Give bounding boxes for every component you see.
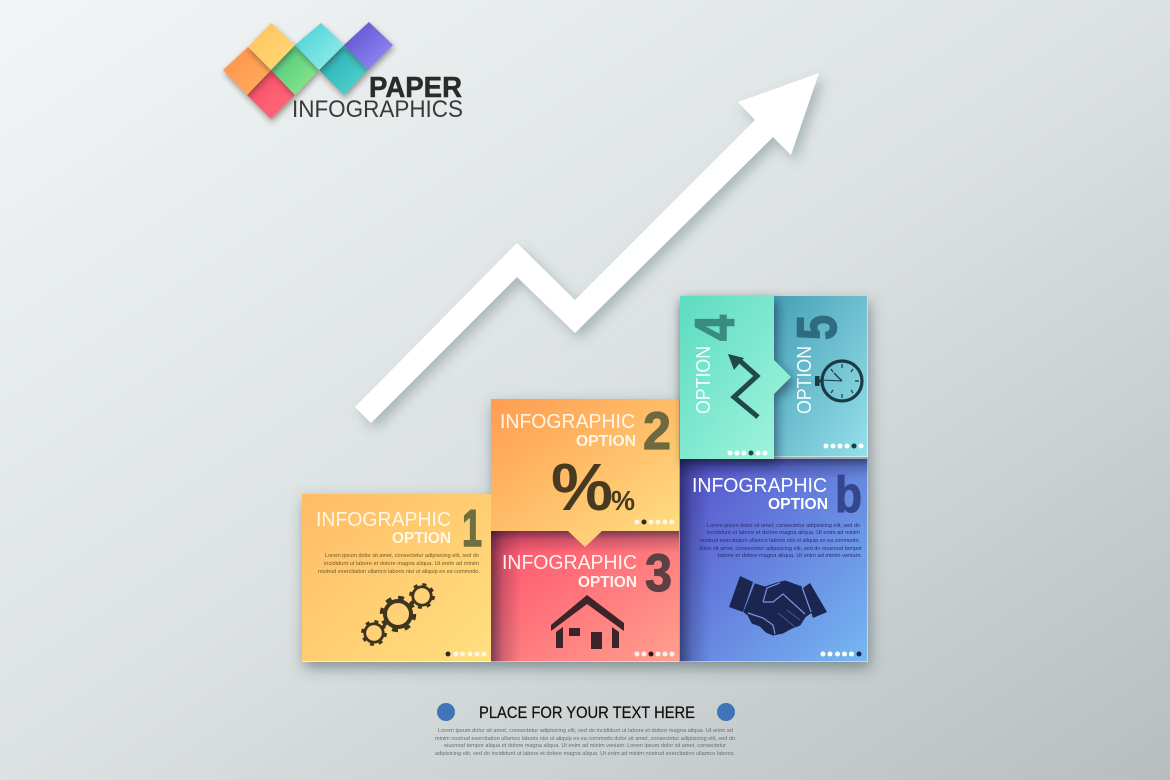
footer text block: adipisicing elit, sed do incididunt ut labore et dolore magna aliqua. Ut enim ad minim nostrud exercitation ullamco laboris. — [435, 751, 735, 757]
panel: option 4 — [680, 296, 791, 459]
pagination dots — [634, 652, 674, 656]
footer text block: minim nostrud exercitation ullamco laboris nisi ut aliquip ex ea commodo dolor sit amet, consectetur adipisicing elit, sed do — [435, 736, 735, 742]
rising white arrow — [355, 73, 819, 423]
panel: infographic option 2 — [491, 399, 679, 547]
heading: option 3: INFOGRAPHIC — [502, 552, 637, 574]
heading: option 3: OPTION — [578, 574, 637, 591]
shared panel shadow — [302, 296, 868, 662]
logo: paper infographics — [223, 22, 463, 123]
heading: option 1: INFOGRAPHIC — [316, 509, 451, 531]
logo mosaic of coloured diamonds — [223, 22, 393, 119]
footer text block — [435, 728, 735, 757]
text block: option 6: dolor sit amet, consectetur adipisicing elit, sed do eiusmod tempor — [699, 546, 862, 552]
panel: option 6 — [680, 459, 868, 662]
pointer tab — [568, 531, 602, 547]
heading: option 6: OPTION — [768, 496, 828, 513]
icon: handshake — [729, 576, 827, 635]
heading: option 2: OPTION — [576, 433, 636, 450]
text block: option 6: Lorem ipsum dolor sit amet, consectetur adipisicing elit, sed do — [707, 523, 860, 529]
pagination dots — [634, 520, 674, 524]
text block: option 6 — [699, 523, 862, 559]
icon: gears — [362, 584, 434, 644]
heading: option 1: OPTION — [392, 530, 451, 547]
logo wordmark: INFOGRAPHICS — [292, 96, 463, 123]
label: option 4: OPTION — [693, 346, 715, 414]
text block: option 1: incididunt ut labore et dolore magna aliqua. Ut enim ad minim — [324, 561, 479, 567]
footer text block: Lorem ipsum dolor sit amet, consectetur adipisicing elit, sed do incididunt ut labore et dolore magna aliqua. Ut enim ad — [438, 728, 733, 734]
panel: infographic option 1 — [302, 494, 491, 662]
text block: option 1: nostrud exercitation ullamco laboris nisi ut aliquip ex ea commodo. — [318, 569, 480, 575]
panel: option 5 — [774, 296, 868, 457]
blue dot right — [717, 703, 735, 721]
heading: option 2: INFOGRAPHIC — [500, 411, 635, 433]
heading: option 6: INFOGRAPHIC — [692, 475, 827, 497]
heading: option 6 — [692, 475, 828, 513]
text block: option 6: nostrud exercitation ullamco laboris nisi ut aliquip ex ea commodo. — [700, 538, 860, 544]
numeral b: b — [835, 466, 862, 523]
pagination dots — [728, 450, 768, 456]
heading: option 3 — [502, 552, 637, 591]
numeral 1: 1 — [462, 500, 482, 558]
text block: option 1 — [318, 553, 480, 575]
logo wordmark: PAPER — [369, 72, 462, 104]
blue dot left — [437, 703, 455, 721]
pagination dots — [446, 652, 486, 656]
numeral 5: 5 — [785, 315, 848, 340]
footer heading: PLACE FOR YOUR TEXT HERE — [479, 703, 695, 722]
panel: infographic option 3 — [491, 531, 679, 662]
icon: house — [551, 595, 624, 649]
icon: stopwatch — [815, 361, 862, 401]
footer title with blue dots — [437, 703, 735, 722]
label: option 5: OPTION — [794, 346, 816, 414]
numeral 4: 4 — [683, 315, 746, 341]
footer text block: eiusmod tempor aliqua et dolore magna aliqua. Ut enim ad minim veniam. Lorem ipsum dolor sit amet, consectetur — [444, 743, 726, 749]
heading: option 1 — [316, 509, 451, 547]
numeral 3: 3 — [645, 544, 672, 603]
icon: percent signs: % — [551, 450, 613, 525]
numeral 2: 2 — [643, 402, 671, 461]
logo wordmark — [292, 72, 463, 123]
icon: zigzag arrow — [728, 354, 758, 417]
icon: percent signs: % — [611, 485, 635, 516]
text block: option 6: incididunt ut labore et dolore magna aliqua. Ut enim ad minim — [707, 530, 860, 536]
heading: option 2 — [500, 411, 636, 450]
text block: option 1: Lorem ipsum dolor sit amet, consectetur adipisicing elit, sed do — [325, 553, 479, 559]
text block: option 6: labore et dolore magna aliqua. Ut enim ad minim veniam. — [718, 553, 862, 559]
pagination dots — [824, 444, 864, 448]
pagination dots — [820, 652, 862, 656]
